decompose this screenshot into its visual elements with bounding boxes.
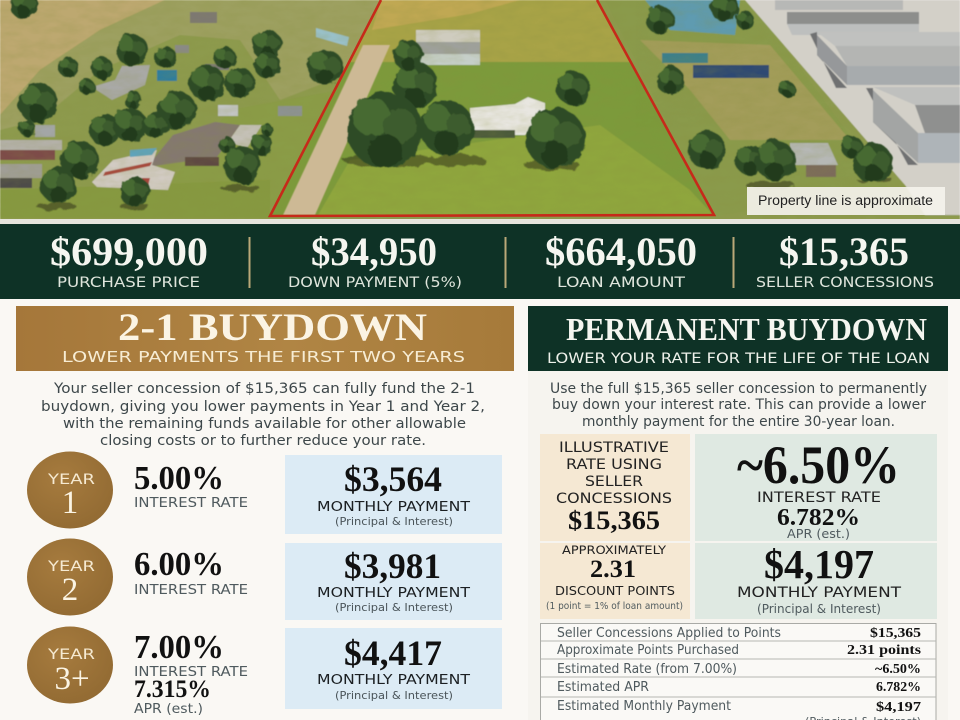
- table row: estimated monthly payment: [557, 699, 921, 720]
- year 3+ payment: MONTHLY PAYMENT: [317, 672, 471, 688]
- stat: seller concessions: $15,365: [779, 229, 909, 274]
- table row: estimated rate: Estimated Rate (from 7.00%): [557, 662, 737, 677]
- table row: points purchased: 2.31 points: [847, 642, 921, 657]
- gravel driveway: [283, 45, 390, 215]
- year 2 rate: INTEREST RATE: [134, 582, 248, 598]
- card: discount points: APPROXIMATELY: [562, 543, 667, 557]
- table row: estimated APR: Estimated APR: [557, 680, 649, 695]
- year 3+ payment: $4,417: [344, 633, 442, 673]
- stat: purchase price: $699,000: [50, 229, 208, 274]
- badge: year 2: 2: [62, 572, 78, 608]
- card: monthly payment: MONTHLY PAYMENT: [737, 585, 901, 601]
- intro text: permanent buydown: monthly payment for the entire 30-year loan.: [582, 414, 895, 430]
- trees on the property: [347, 40, 590, 168]
- heading: 2-1 buydown: 2-1 BUYDOWN: [118, 306, 427, 349]
- year 1 payment: $3,564: [344, 459, 442, 499]
- card: discount points: 2.31: [590, 556, 636, 583]
- badge: year 3+: YEAR: [47, 647, 95, 663]
- intro text: permanent buydown: [550, 381, 927, 430]
- card: illustrative rate: RATE USING: [566, 457, 662, 473]
- badge: year 3+: [27, 626, 113, 704]
- table row: estimated rate: ~6.50%: [875, 661, 921, 676]
- year 2 payment: MONTHLY PAYMENT: [317, 585, 471, 601]
- year 1 rate: [134, 460, 248, 511]
- year 3+ payment: (Principal & Interest): [335, 689, 453, 702]
- intro text: permanent buydown: Use the full $15,365 seller concession to permanently: [550, 381, 927, 397]
- card: discount points: DISCOUNT POINTS: [555, 583, 675, 598]
- card: illustrative rate: ILLUSTRATIVE: [559, 440, 669, 456]
- table row: estimated monthly payment: $4,197: [876, 699, 921, 714]
- intro text: permanent buydown: buy down your interest rate. This can provide a lower: [552, 397, 926, 413]
- card: illustrative rate: [540, 434, 690, 541]
- year 3+ payment: [285, 628, 502, 709]
- year 3+ rate and APR: 7.00%: [134, 629, 224, 666]
- year 1 rate: INTEREST RATE: [134, 495, 248, 511]
- year 2 payment: [285, 543, 502, 620]
- intro text: 2-1 buydown: with the remaining funds available for other allowable: [63, 416, 466, 432]
- summary table: [540, 624, 936, 720]
- card: discount points: [540, 543, 690, 619]
- year 1 payment: (Principal & Interest): [335, 515, 453, 528]
- stat: down payment: DOWN PAYMENT (5%): [288, 275, 462, 291]
- year 2 rate: 6.00%: [134, 546, 224, 583]
- stat: seller concessions: [756, 229, 934, 291]
- table row: estimated rate: [557, 661, 921, 677]
- table row: estimated APR: 6.782%: [876, 679, 921, 694]
- aerial photo of the property: [0, 0, 960, 224]
- table row: points purchased: Approximate Points Purchased: [557, 643, 739, 658]
- card: illustrative rate: $15,365: [568, 506, 660, 535]
- badge: year 3+: 3+: [54, 661, 90, 697]
- panel: 2-1 buydown: [16, 306, 514, 720]
- table row: seller concessions: $15,365: [870, 625, 921, 640]
- badge: year 1: YEAR: [47, 472, 95, 488]
- stat: loan amount: $664,050: [545, 229, 697, 274]
- stat: seller concessions: SELLER CONCESSIONS: [756, 275, 934, 291]
- heading: 2-1 buydown: [16, 306, 514, 371]
- stat: loan amount: LOAN AMOUNT: [557, 275, 685, 291]
- heading: permanent buydown: LOWER YOUR RATE FOR THE LIFE OF THE LOAN: [547, 351, 930, 367]
- panel: permanent buydown: [528, 306, 948, 720]
- red property boundary: [270, 0, 714, 216]
- year 1 payment: MONTHLY PAYMENT: [317, 499, 471, 515]
- card: illustrative rate: SELLER: [585, 474, 643, 490]
- key figures band: [0, 224, 960, 299]
- caption: property line: Property line is approximate: [758, 193, 933, 208]
- year 1 rate: 5.00%: [134, 460, 224, 497]
- table row: seller concessions: Seller Concessions Applied to Points: [557, 626, 781, 641]
- ground texture: [0, 0, 846, 216]
- year 2 payment: (Principal & Interest): [335, 601, 453, 614]
- year 3+ rate and APR: APR (est.): [134, 702, 203, 717]
- stat: purchase price: PURCHASE PRICE: [57, 275, 200, 291]
- card: illustrative rate: CONCESSIONS: [556, 491, 672, 507]
- year 3+ rate and APR: INTEREST RATE: [134, 664, 248, 680]
- stat: down payment: $34,950: [311, 229, 437, 274]
- table row: estimated monthly payment: Estimated Monthly Payment: [557, 699, 731, 714]
- intro text: 2-1 buydown: closing costs or to further reduce your rate.: [100, 433, 426, 449]
- card: estimated rate: INTEREST RATE: [757, 490, 881, 506]
- card: monthly payment: $4,197: [764, 541, 874, 587]
- stat: down payment: [288, 229, 462, 291]
- year 2 rate: [134, 546, 248, 598]
- stat: purchase price: [50, 229, 208, 291]
- card: monthly payment: (Principal & Interest): [757, 602, 881, 616]
- card: estimated rate: APR (est.): [787, 527, 850, 541]
- neighbouring trees: [10, 0, 893, 207]
- badge: year 1: 1: [62, 485, 78, 521]
- intro text: 2-1 buydown: buydown, giving you lower payments in Year 1 and Year 2,: [41, 399, 485, 415]
- heading: permanent buydown: [528, 306, 948, 371]
- year 3+ rate and APR: [134, 629, 248, 717]
- badge: year 1: [27, 452, 113, 528]
- table row: estimated APR: [557, 679, 921, 695]
- year 2 payment: $3,981: [344, 546, 441, 586]
- intro text: 2-1 buydown: [41, 381, 485, 449]
- badge: year 2: [27, 538, 113, 616]
- caption: property line: [747, 187, 945, 215]
- table row: seller concessions: [557, 625, 921, 641]
- table row: points purchased: [557, 642, 921, 658]
- heading: 2-1 buydown: LOWER PAYMENTS THE FIRST TWO YEARS: [62, 348, 465, 366]
- heading: permanent buydown: PERMANENT BUYDOWN: [566, 311, 927, 347]
- card: discount points: (1 point = 1% of loan amount): [546, 601, 683, 612]
- year 3+ rate and APR: 7.315%: [134, 676, 211, 703]
- card: estimated rate: [695, 434, 937, 541]
- badge: year 2: YEAR: [47, 559, 95, 575]
- card: estimated rate: ~6.50%: [737, 435, 900, 495]
- card: monthly payment: [695, 541, 937, 619]
- intro text: 2-1 buydown: Your seller concession of $15,365 can fully fund the 2-1: [53, 381, 475, 397]
- card: estimated rate: 6.782%: [777, 505, 860, 531]
- year 1 payment: [285, 455, 502, 534]
